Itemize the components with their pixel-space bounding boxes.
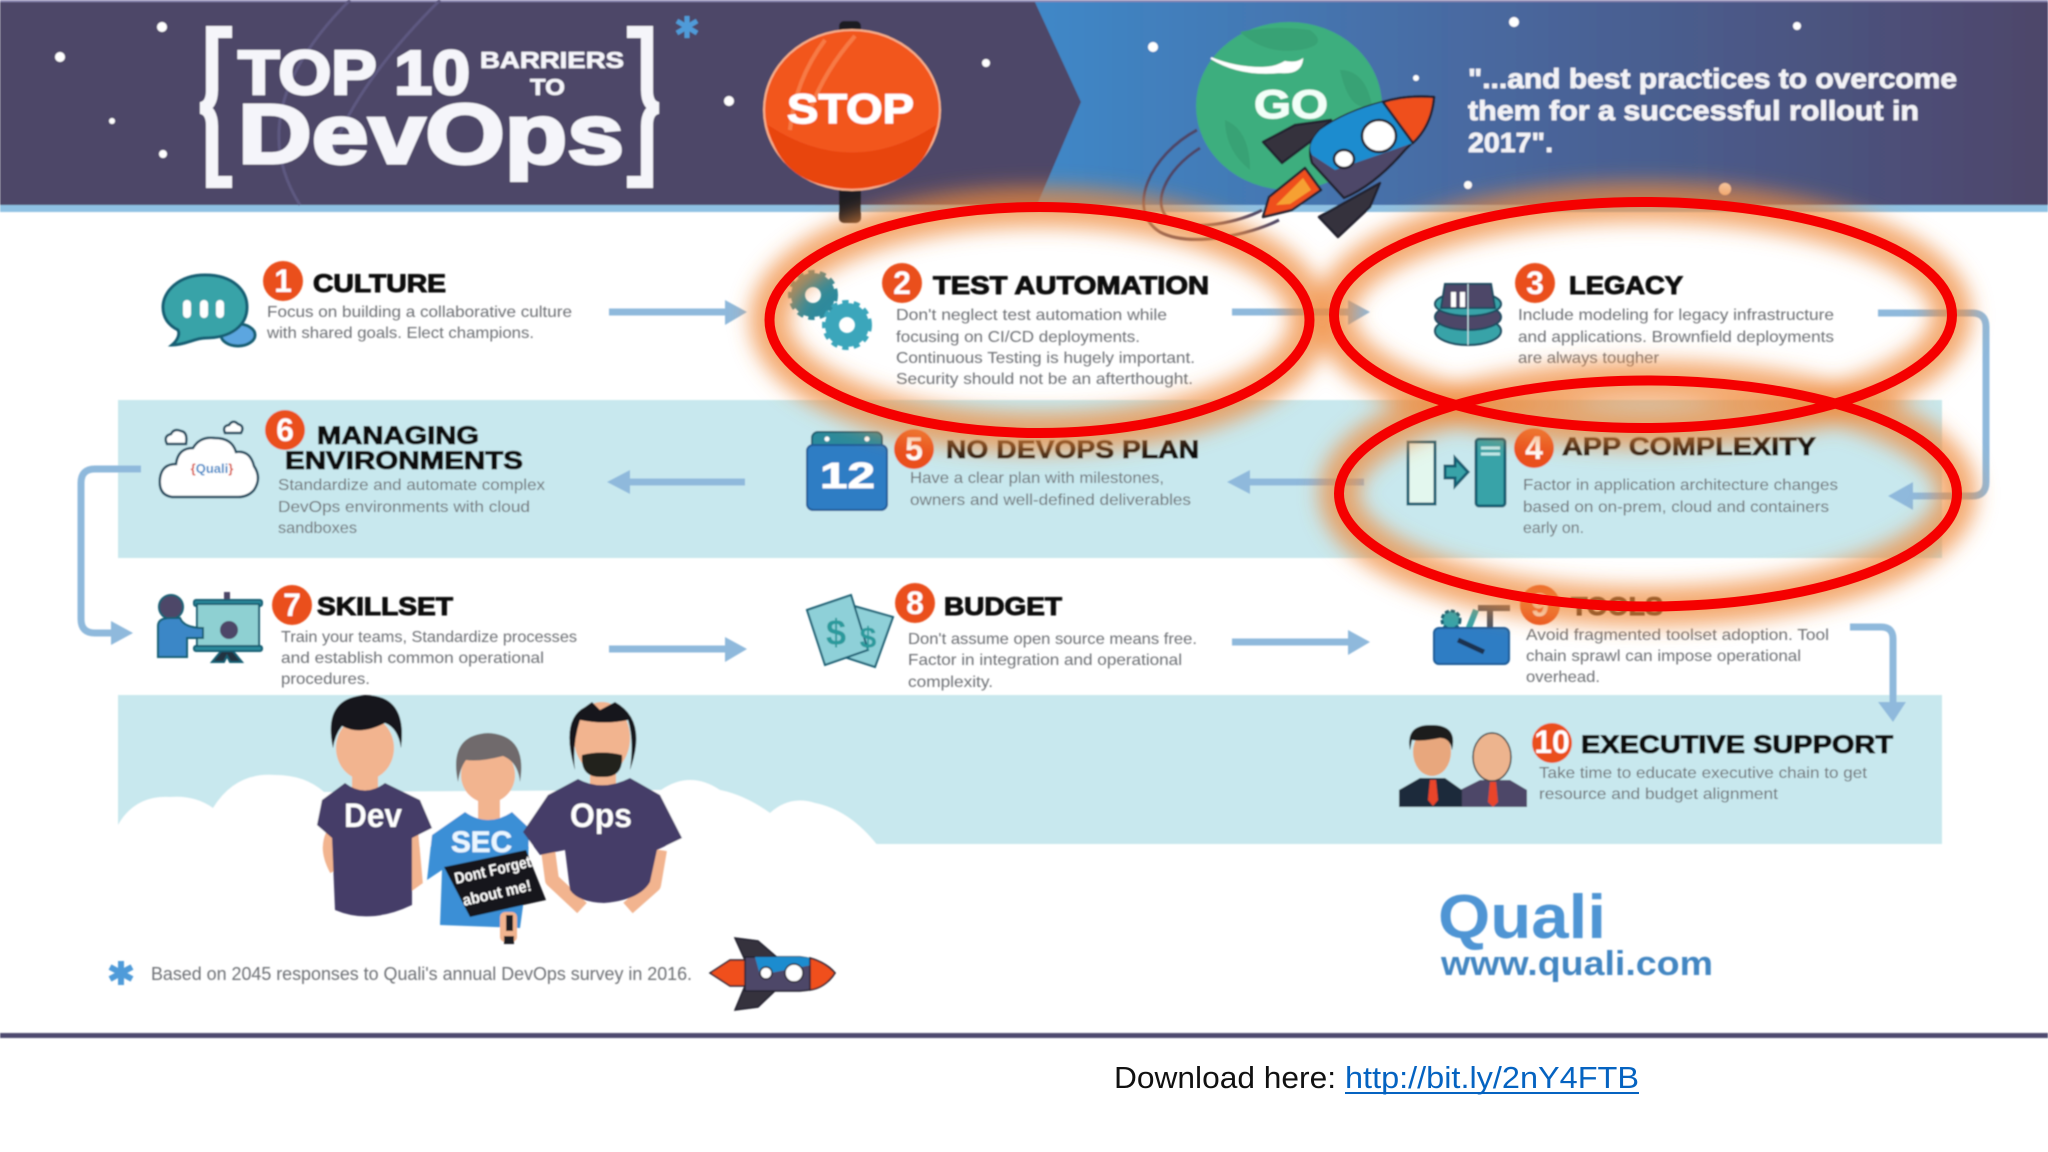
title: TOP 10 (238, 39, 470, 108)
description: and applications. Brownfield deployments (1518, 329, 1834, 346)
quote (1468, 63, 1957, 158)
item 4: app complexity (1408, 428, 1838, 537)
badge 6: 6 (276, 412, 294, 448)
red ellipse: legacy (1334, 202, 1952, 428)
badge 1: 1 (274, 263, 292, 299)
icon: asterisk (110, 961, 132, 985)
description: Standardize and automate complex (278, 477, 545, 494)
people: sec: SEC (451, 826, 512, 859)
title: TO (530, 74, 565, 100)
badge 7: 7 (283, 587, 301, 623)
description (1523, 477, 1838, 537)
red ellipse: test automation (770, 207, 1310, 433)
description: focusing on CI/CD deployments. (896, 329, 1140, 346)
badge 1 (263, 261, 303, 301)
badge 10: 10 (1534, 724, 1570, 760)
badge 3: 3 (1526, 265, 1544, 301)
item 10: executive support (1399, 723, 1893, 807)
heading (285, 422, 523, 475)
description: Factor in integration and operational (908, 652, 1182, 669)
icon: money (807, 595, 893, 667)
description (908, 631, 1197, 691)
description: complexity. (908, 674, 993, 691)
stop sign (763, 21, 941, 223)
icon: stacked servers (1435, 284, 1501, 345)
download line: http://bit.ly/2nY4FTB (1345, 1060, 1639, 1095)
people: ops (523, 702, 682, 908)
highlight glow (770, 202, 1957, 606)
description: Train your teams, Standardize processes (281, 629, 577, 646)
description: procedures. (281, 671, 370, 688)
icon: money: $ (860, 622, 877, 655)
rocket (1263, 97, 1434, 237)
description (1539, 765, 1868, 803)
footnote (110, 961, 692, 985)
rocket trail (1144, 130, 1279, 239)
description (896, 307, 1195, 388)
people: sec: about me! (461, 878, 533, 910)
badge 8 (895, 583, 935, 623)
icon: executives (1399, 725, 1527, 807)
item 9: tools (1434, 585, 1829, 686)
small rocket (710, 938, 835, 1010)
description (1526, 627, 1829, 686)
band: bottom row (118, 695, 1942, 844)
description: based on on-prem, cloud and containers (1523, 499, 1829, 516)
badge 3 (1515, 263, 1555, 303)
badge 4 (1514, 428, 1554, 468)
quote: them for a successful rollout in (1468, 95, 1919, 126)
badge 4: 4 (1525, 430, 1543, 466)
heading: BUDGET (944, 593, 1062, 621)
description: Don't assume open source means free. (908, 631, 1197, 648)
description: resource and budget alignment (1539, 786, 1779, 803)
people: sec (427, 733, 546, 944)
quali logo: Quali (1438, 883, 1606, 952)
badge 2: 2 (893, 265, 911, 301)
item 3: legacy (1435, 263, 1834, 367)
survey note: Based on 2045 responses to Quali's annual DevOps survey in 2016. (151, 964, 692, 984)
icon: asterisk (677, 16, 697, 38)
description: Avoid fragmented toolset adoption. Tool (1526, 627, 1829, 644)
heading: TEST AUTOMATION (933, 272, 1209, 300)
description: and establish common operational (281, 650, 544, 667)
heading: APP COMPLEXITY (1562, 433, 1816, 461)
description: Security should not be an afterthought. (896, 371, 1193, 388)
description: DevOps environments with cloud (278, 499, 530, 516)
icon: cloud: {Quali} (191, 461, 233, 476)
heading: LEGACY (1569, 272, 1683, 300)
title: DevOps (238, 87, 624, 181)
description: sandboxes (278, 520, 357, 537)
item 1: culture (163, 261, 572, 346)
clouds (118, 775, 878, 846)
description (910, 470, 1191, 509)
icon: app migration (1408, 439, 1505, 506)
download line (1114, 1060, 1639, 1095)
icon: speech bubbles (163, 275, 255, 346)
description (278, 477, 545, 537)
download line: Download here: (1114, 1060, 1336, 1095)
description: chain sprawl can impose operational (1526, 648, 1801, 665)
heading: ENVIRONMENTS (285, 447, 523, 475)
description: overhead. (1526, 669, 1600, 686)
heading: TOOLS (1571, 593, 1663, 621)
description: are always tougher (1518, 350, 1660, 367)
description: Don't neglect test automation while (896, 307, 1167, 324)
item 2: test automation (791, 263, 1209, 388)
icon: gears (791, 273, 869, 347)
quote: 2017". (1468, 127, 1553, 158)
header banner (0, 0, 2048, 212)
heading: CULTURE (313, 270, 446, 298)
badge 7 (272, 585, 312, 625)
badge 6 (265, 410, 305, 450)
description: owners and well-defined deliverables (910, 492, 1191, 509)
icon: calendar (807, 432, 887, 510)
description (1518, 307, 1834, 367)
quote: "...and best practices to overcome (1468, 63, 1957, 94)
people: dev: Dev (344, 797, 402, 835)
icon: toolbox (1434, 608, 1510, 664)
item 5: no devops plan (807, 429, 1199, 510)
heading: MANAGING (317, 422, 479, 450)
icon: presenter (158, 592, 262, 662)
band: middle row (118, 400, 1942, 558)
heading: EXECUTIVE SUPPORT (1581, 731, 1893, 759)
icon: money: $ (826, 612, 846, 653)
badge 8: 8 (906, 585, 924, 621)
title: BARRIERS (480, 47, 624, 73)
description: Focus on building a collaborative culture (267, 304, 572, 321)
item 7: skillset (158, 585, 577, 688)
quali logo (1438, 883, 1713, 983)
description: Continuous Testing is hugely important. (896, 350, 1195, 367)
red ellipse: app complexity (1339, 380, 1957, 606)
quali logo: www.quali.com (1440, 945, 1713, 983)
people: sec: Dont Forget (453, 854, 533, 888)
footer rule (0, 1033, 2048, 1038)
description: Factor in application architecture changes (1523, 477, 1838, 494)
icon: cloud (160, 422, 258, 497)
badge 2 (882, 263, 922, 303)
description: with shared goals. Elect champions. (266, 325, 534, 342)
badge 9 (1520, 585, 1560, 625)
description: Take time to educate executive chain to get (1539, 765, 1868, 782)
go globe (1196, 22, 1382, 190)
badge 5 (894, 429, 934, 469)
title (201, 32, 658, 182)
heading: NO DEVOPS PLAN (946, 436, 1199, 464)
heading: SKILLSET (317, 593, 453, 621)
people: dev (317, 695, 432, 916)
badge 5: 5 (905, 431, 923, 467)
description: early on. (1523, 520, 1584, 537)
description: Have a clear plan with milestones, (910, 470, 1164, 487)
description (281, 629, 577, 688)
stop sign: STOP (787, 85, 914, 132)
description: Include modeling for legacy infrastructure (1518, 307, 1834, 324)
connector arrows (81, 300, 1986, 722)
go globe: GO (1254, 83, 1328, 127)
item 8: budget (807, 583, 1197, 691)
description (266, 304, 572, 342)
item 6: managing environments (160, 410, 545, 537)
people: ops: Ops (570, 797, 632, 835)
badge 9: 9 (1531, 587, 1549, 623)
icon: calendar: 12 (820, 455, 875, 496)
